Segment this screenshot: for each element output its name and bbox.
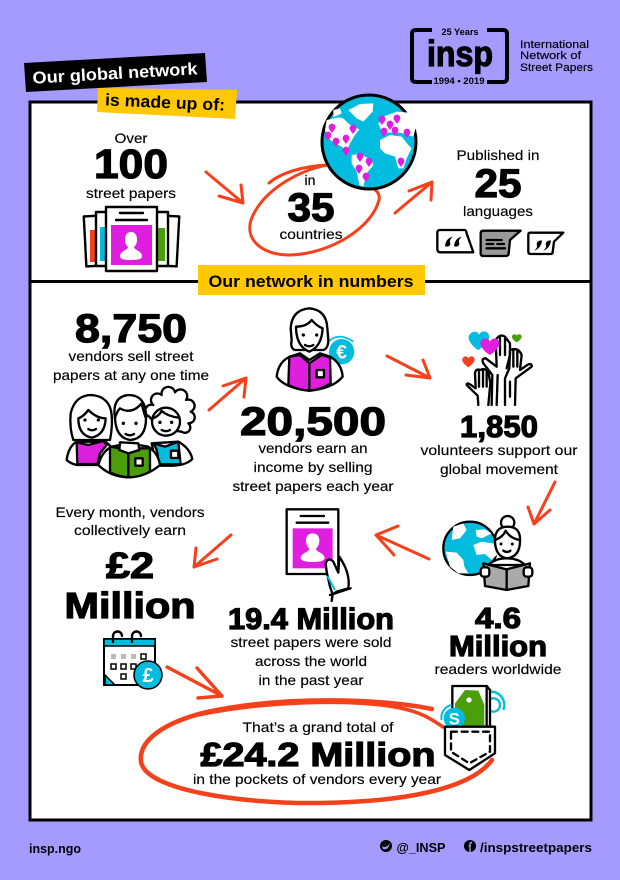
stat: 20,500 vendors earn: vendors earn an [258, 440, 368, 456]
stat: 8,750 vendors [53, 307, 209, 383]
arrow: £2 from 19.4 [194, 535, 231, 567]
arrow: 100 to 35 [206, 172, 243, 203]
icon: vendor with euro: € [336, 343, 347, 364]
icon: vendor with euro [277, 308, 354, 391]
arrow: 8,750 to 20,500 [209, 378, 246, 410]
total: £24.2 Million: That’s a grand total of [242, 719, 394, 735]
stat: 1,850 volunteers: volunteers support our [420, 442, 578, 458]
total: £24.2 Million: £24.2 Million [200, 736, 436, 773]
stat: 100 street papers [86, 130, 176, 201]
icon: speech bubbles [437, 230, 563, 256]
logo: insp 25 years: insp [427, 33, 493, 74]
icon: calendar with pound coin: £ [142, 665, 154, 687]
main panel frame [30, 102, 591, 820]
stat: 20,500 vendors earn: income by selling [254, 459, 372, 475]
stat: 25 languages: 25 [474, 162, 522, 206]
icon: raised hands and hearts [462, 331, 532, 405]
stat: in 35 countries: in [304, 172, 316, 188]
logo: insp 25 years: International [520, 39, 589, 51]
stat: 4.6 Million readers [434, 603, 562, 677]
icon: globe with pins [322, 95, 416, 189]
stat: in 35 countries: 35 [288, 186, 334, 230]
arrow: 1,850 to 4.6 Million [528, 482, 555, 524]
stat: 1,850 volunteers [420, 409, 578, 477]
icon: paper with hand [287, 509, 351, 601]
arrow: 35 to 25 [395, 182, 432, 213]
logo: insp 25 years [412, 27, 594, 86]
stat: every month £2 Million: collectively earn [74, 522, 186, 538]
total: £24.2 Million: in the pockets of vendors every year [193, 771, 441, 787]
arrow: 20,500 to 1,850 [387, 356, 430, 378]
logo: insp 25 years: Network of [520, 50, 582, 62]
total: £24.2 Million [193, 719, 441, 787]
stat: 100 street papers: 100 [94, 141, 168, 187]
logo: insp 25 years: Street Papers [520, 62, 594, 74]
stat: 1,850 volunteers: global movement [440, 461, 558, 477]
footer: facebook handle: /inspstreetpapers [480, 840, 592, 855]
stat: 20,500 vendors earn [232, 400, 394, 494]
stat: 4.6 Million readers: 4.6 [475, 603, 521, 635]
stat: 100 street papers: Over [114, 130, 148, 146]
stat: every month £2 Million: Every month, vendors [56, 504, 204, 520]
title: Our global network: Our global network [32, 59, 198, 88]
stat: 19.4 Million papers sold: street papers were sold [230, 634, 392, 650]
section heading: Our network in numbers: Our network in numbers [208, 272, 414, 291]
stat: 1,850 volunteers: 1,850 [460, 409, 538, 444]
logo: insp 25 years: 25 Years [442, 27, 478, 37]
stat: 19.4 Million papers sold: in the past year [258, 672, 364, 688]
stat: 19.4 Million papers sold: 19.4 Million [228, 603, 394, 636]
stat: 8,750 vendors: vendors sell street [68, 348, 194, 364]
icon: pocket with money: S [449, 709, 460, 728]
stat: 20,500 vendors earn: street papers each year [232, 478, 394, 494]
icon: pocket with money [441, 686, 504, 770]
stat: every month £2 Million [56, 504, 204, 626]
stat: 100 street papers: street papers [86, 185, 176, 201]
stat: every month £2 Million: Million [64, 585, 196, 626]
subtitle: is made up of: is made up of: [105, 90, 225, 115]
footer: twitter handle: @_INSP [396, 840, 446, 855]
stat: every month £2 Million: £2 [106, 545, 154, 586]
section heading: Our network in numbers [198, 265, 425, 295]
stat: in 35 countries: countries [280, 226, 342, 242]
icon: calendar with pound coin [104, 632, 162, 689]
red scribble circle around 35 [250, 165, 379, 255]
stat: 19.4 Million papers sold [228, 603, 394, 688]
icon: three vendors [67, 387, 195, 477]
stat: in 35 countries [280, 172, 342, 242]
stat: 25 languages: languages [463, 203, 533, 219]
stat: 4.6 Million readers: readers worldwide [434, 661, 562, 677]
stat: 20,500 vendors earn: 20,500 [240, 400, 386, 444]
arrow: 4.6 Million to 19.4 Million [376, 526, 429, 559]
subtitle: is made up of [97, 88, 237, 119]
stat: 8,750 vendors: 8,750 [75, 307, 187, 351]
logo: insp 25 years: 1994 • 2019 [434, 76, 484, 86]
footer: website: insp.ngo [29, 841, 81, 856]
stat: 25 languages: Published in [456, 147, 540, 163]
stat: 4.6 Million readers: Million [449, 631, 547, 663]
stat: 8,750 vendors: papers at any one time [53, 367, 209, 383]
stat: 19.4 Million papers sold: across the world [255, 653, 367, 669]
title: Our global network [24, 53, 207, 92]
stat: 25 languages [456, 147, 540, 219]
icon: globe and reader [443, 516, 532, 590]
icon: street papers stack [84, 207, 179, 271]
red scribble ellipse around total [141, 700, 492, 803]
arrow: calendar to total [167, 667, 222, 698]
